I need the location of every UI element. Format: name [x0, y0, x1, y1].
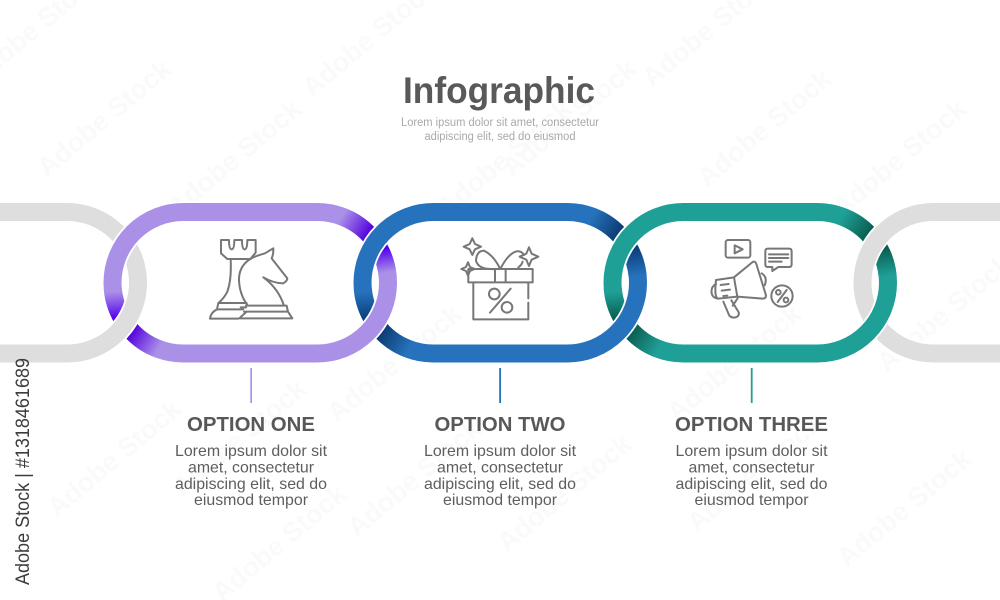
text: Adobe Stock: [681, 408, 828, 538]
text block: option one: [175, 413, 328, 509]
text block: option three: OPTION THREE: [675, 413, 828, 436]
text block: option one: amet, consectetur: [188, 460, 315, 476]
text block: option two: Lorem ipsum dolor sit: [424, 443, 577, 460]
text: Adobe Stock: [31, 53, 178, 183]
link: teal: [612, 212, 888, 354]
text: Adobe Stock: [826, 93, 973, 223]
subtitle: [401, 117, 599, 143]
icon: megaphone with media: [711, 240, 793, 318]
text: Adobe Stock: [41, 393, 188, 523]
text block: option two: eiusmod tempor: [443, 492, 558, 509]
text: Adobe Stock: [691, 63, 838, 193]
text: Adobe Stock: [496, 53, 643, 183]
text: Adobe Stock: [341, 413, 488, 543]
text block: option three: adipiscing elit, sed do: [676, 476, 828, 493]
text: Adobe Stock: [661, 298, 808, 428]
text: Adobe Stock: [491, 428, 638, 558]
text: Adobe Stock: [321, 298, 468, 428]
text block: option three: [675, 413, 828, 509]
text: Adobe Stock: [831, 443, 978, 573]
text block: option two: adipiscing elit, sed do: [424, 476, 576, 493]
text block: option two: OPTION TWO: [434, 413, 566, 436]
link: blue: [362, 212, 638, 354]
text block: option three: Lorem ipsum dolor sit: [676, 443, 828, 460]
connector: option one: [250, 368, 252, 403]
text: Adobe Stock: [161, 93, 308, 223]
text: Adobe Stock: [431, 93, 578, 223]
text block: option one: Lorem ipsum dolor sit: [175, 443, 328, 460]
subtitle: Lorem ipsum dolor sit amet, consectetur: [401, 117, 599, 129]
link: left gray: [0, 212, 138, 354]
text block: option two: [424, 413, 577, 509]
interlocking chain of links: [0, 212, 1000, 354]
text block: option three: amet, consectetur: [688, 460, 815, 476]
title: Infographic: [403, 70, 595, 111]
link: purple: [112, 212, 388, 354]
icon: chess rook and knight: [210, 240, 292, 319]
text block: option one: eiusmod tempor: [194, 492, 309, 509]
text block: option one: adipiscing elit, sed do: [175, 476, 327, 493]
subtitle: adipiscing elit, sed do eiusmod: [424, 131, 576, 143]
text: Adobe Stock: [166, 373, 313, 503]
text block: option three: eiusmod tempor: [694, 492, 809, 509]
side credit: Adobe Stock | #1318461689: [13, 358, 34, 585]
connector: option three: [751, 368, 753, 403]
icon: gift box with percent: [461, 238, 538, 319]
link: right gray: [862, 212, 1000, 354]
text block: option two: amet, consectetur: [437, 460, 564, 476]
text block: option one: OPTION ONE: [187, 413, 315, 436]
connector: option two: [499, 368, 501, 403]
